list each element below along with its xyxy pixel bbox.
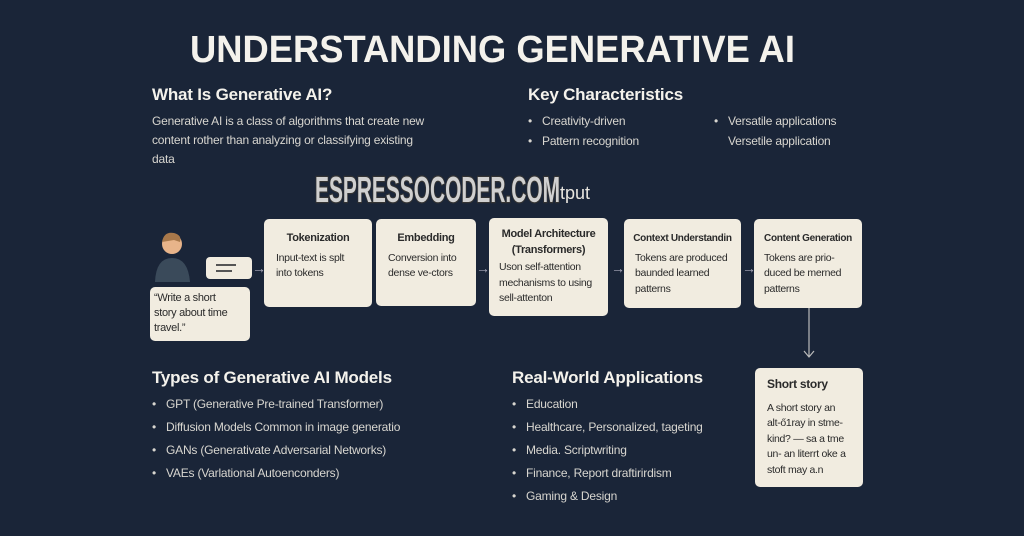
section: types of models: GPT (Generative Pre-trained Transformer) [166, 397, 383, 411]
section: types of models: Diffusion Models Common in image generatio [166, 420, 400, 434]
arrows: → [476, 260, 490, 276]
section: real-world applications: Gaming & Design [526, 489, 617, 503]
icon: speech bubble [206, 257, 252, 279]
section: real-world applications: Finance, Report draftirirdism [526, 466, 672, 480]
card: model architecture: (Transformers) [512, 244, 585, 256]
card: model architecture [489, 218, 608, 316]
card: embedding: Embedding [397, 232, 455, 244]
card: short story: A short story an alt-ő1ray in stme-kind? — sa a tme un- an literrt oke a stoft may a.n [767, 402, 846, 476]
card: context understanding: Tokens are produced baunded learned patterns [635, 252, 727, 294]
card: context understanding [624, 219, 741, 308]
section: key characteristics [528, 85, 836, 148]
arrows: → [252, 260, 266, 276]
section: types of models [152, 368, 400, 480]
section: types of models: VAEs (Varlational Autoenconders) [166, 466, 339, 480]
watermark: tput [560, 183, 590, 203]
card: tokenization [264, 219, 372, 307]
section: real-world applications: Real-World Applications [512, 368, 703, 387]
card: content generation: Content Generation [764, 233, 852, 244]
card: tokenization: Tokenization [287, 232, 349, 244]
quote box: “Write a short story about time travel.” [154, 292, 227, 334]
section: what is generative ai [152, 85, 424, 166]
arrows [252, 260, 756, 276]
section: real-world applications [512, 368, 703, 503]
section: real-world applications: Media. Scriptwriting [526, 443, 627, 457]
section: what is generative ai: What Is Generative AI? [152, 85, 332, 104]
card: model architecture: Model Architecture [502, 228, 595, 240]
quote box [150, 287, 250, 341]
card: content generation [754, 219, 862, 308]
card: model architecture: Uson self-attention mechanisms to using sell-attenton [499, 261, 592, 304]
arrows: → [611, 260, 625, 276]
card: content generation: Tokens are prio-duced be merned patterns [764, 252, 841, 294]
section: types of models: Types of Generative AI Models [152, 368, 392, 387]
text: Creativity-driven [542, 114, 625, 128]
section: types of models: GANs (Generativate Adversarial Networks) [166, 443, 386, 457]
text: Pattern recognition [542, 134, 639, 148]
arrow: down [804, 308, 814, 358]
section: real-world applications: Education [526, 397, 578, 411]
icon: person [155, 232, 190, 282]
card: context understanding: Context Understandin [633, 233, 732, 244]
text: Versatile applications [728, 114, 836, 128]
card: tokenization: Input-text is splt into tokens [276, 252, 344, 279]
card: short story [755, 368, 863, 487]
card: embedding: Conversion into dense ve-ctors [388, 252, 456, 279]
card: embedding [376, 219, 476, 306]
arrows: → [742, 260, 756, 276]
section: key characteristics: Key Characteristics [528, 85, 683, 104]
section: what is generative ai: Generative AI is a class of algorithms that create new content rother than analyzing or classifying existing data [152, 114, 424, 166]
title: UNDERSTANDING GENERATIVE AI [190, 29, 795, 71]
text: Versetile application [728, 134, 831, 148]
section: real-world applications: Healthcare, Personalized, tageting [526, 420, 703, 434]
card: short story: Short story [767, 377, 828, 391]
